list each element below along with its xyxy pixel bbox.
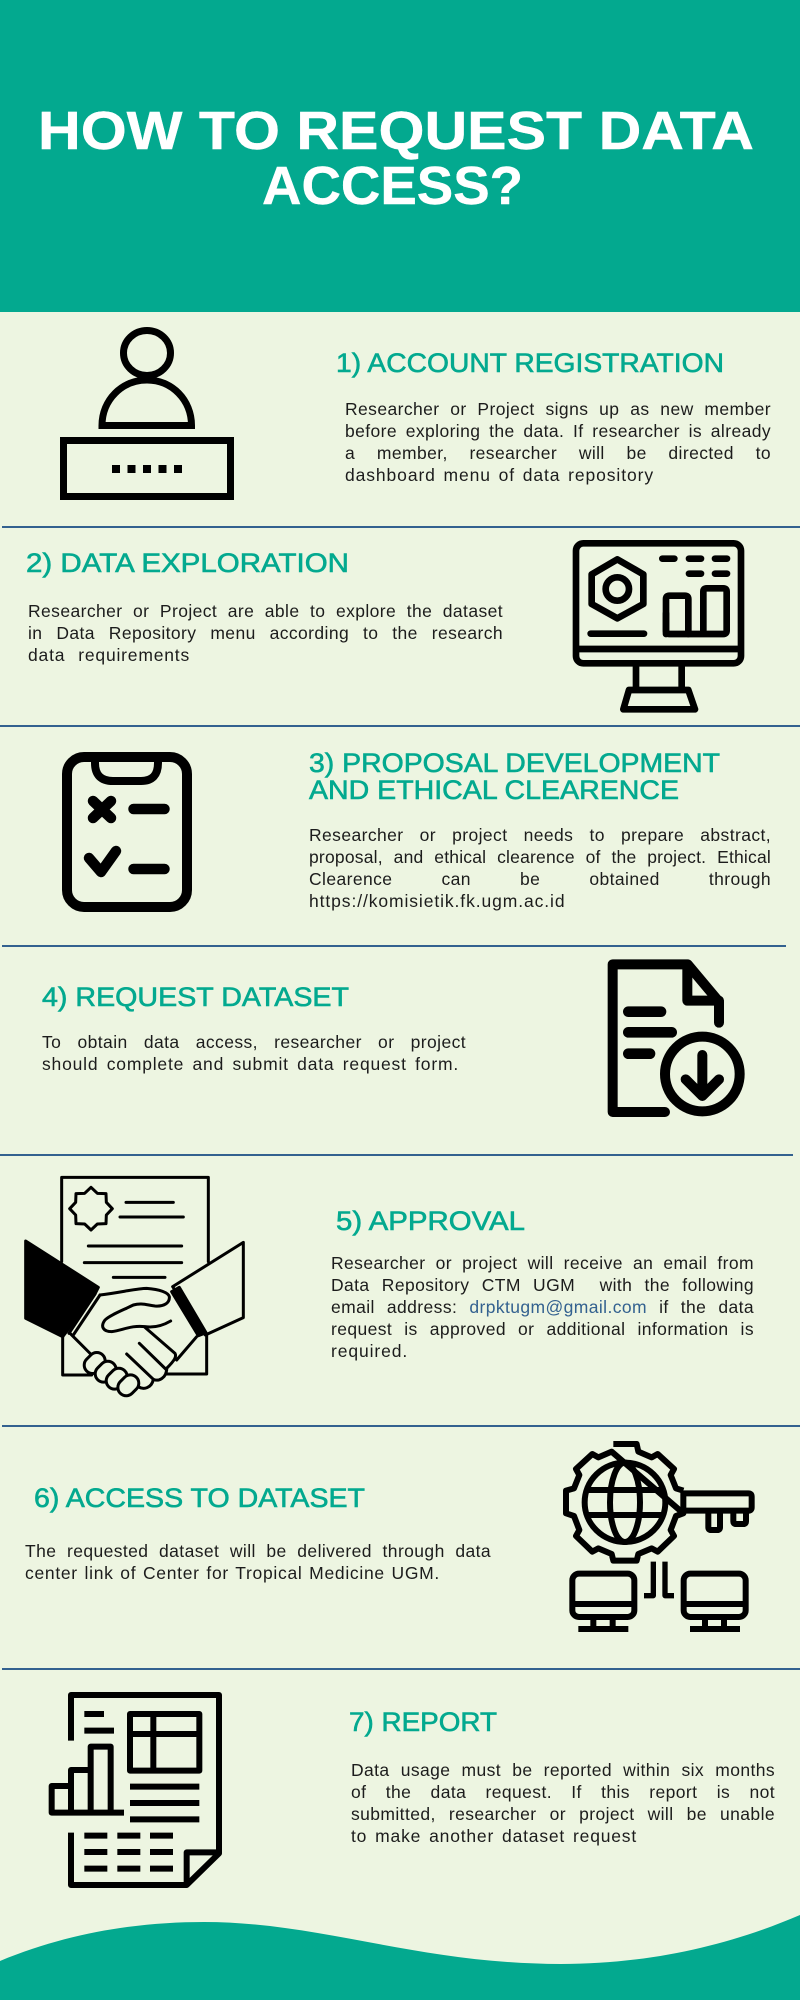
text: approval description: Researcher or project will receive an email from [331, 1253, 754, 1273]
text: approval description: Data Repository CTM UGM with the following [331, 1275, 754, 1295]
text: report description: Data usage must be reported within six months [351, 1760, 775, 1780]
icon: checklist clipboard [62, 752, 192, 912]
panel: step 7 report [48, 1692, 775, 1888]
icon: globe gear key with computers [563, 1441, 755, 1632]
heading: data exploration: 2) DATA EXPLORATION [26, 548, 348, 578]
heading: proposal development and ethical clearence: 3) PROPOSAL DEVELOPMENT [309, 748, 720, 778]
text: approval description: request is approved or additional information is [331, 1319, 754, 1339]
heading: account registration: 1) ACCOUNT REGISTRATION [336, 348, 724, 378]
heading: access to dataset: 6) ACCESS TO DATASET [34, 1483, 365, 1513]
icon: user at login box [60, 327, 234, 500]
heading: report: 7) REPORT [349, 1707, 497, 1737]
text: account registration description: before exploring the data. If researcher is already [345, 421, 771, 441]
panel: step 2 data exploration [26, 540, 744, 713]
text: report description: of the data request. If this report is not [351, 1782, 775, 1802]
panel: step 6 access to dataset [25, 1441, 755, 1632]
text: data exploration description [28, 601, 503, 665]
text: proposal description: https://komisietik.fk.ugm.ac.id [309, 891, 565, 911]
text: access to dataset description [25, 1541, 491, 1583]
text: data exploration description: in Data Repository menu according to the research [28, 623, 503, 643]
panel: step 1 account registration [60, 327, 771, 500]
heading: proposal development and ethical clearence: AND ETHICAL CLEARENCE [309, 775, 679, 805]
text: report description [351, 1760, 775, 1846]
text: proposal description: Researcher or project needs to prepare abstract, [309, 825, 771, 845]
text: access to dataset description: The requested dataset will be delivered through data [25, 1541, 491, 1561]
text: account registration description [345, 399, 771, 485]
text: report description: submitted, researcher or project will be unable [351, 1804, 775, 1824]
text: request dataset description [42, 1032, 466, 1074]
text: request dataset description: To obtain data access, researcher or project [42, 1032, 466, 1052]
icon: handshake over document [24, 1176, 245, 1398]
icon: dashboard monitor [572, 540, 744, 713]
text: account registration description: a member, researcher will be directed to [345, 443, 771, 463]
text: report description: to make another dataset request [351, 1826, 637, 1846]
icon: document download [608, 959, 745, 1117]
text: account registration description: Researcher or Project signs up as new member [345, 399, 771, 419]
text: request dataset description: should complete and submit data request form. [42, 1054, 459, 1074]
header banner [0, 0, 800, 312]
title [38, 101, 754, 216]
text: access to dataset description: center link of Center for Tropical Medicine UGM. [25, 1563, 440, 1583]
title: ACCESS? [262, 156, 523, 216]
heading: proposal development and ethical clearence [308, 748, 720, 805]
text: proposal description: proposal, and ethical clearence of the project. Ethical [309, 847, 771, 867]
title: HOW TO REQUEST DATA [38, 101, 754, 161]
panel: step 3 proposal development [62, 748, 771, 912]
text: proposal description: Clearence can be obtained through [309, 869, 771, 889]
text: proposal description [309, 825, 771, 911]
text: approval description: required. [331, 1341, 408, 1361]
text: approval description: email address: drpktugm@gmail.com if the data [331, 1297, 754, 1317]
text: account registration description: dashboard menu of data repository [345, 465, 654, 485]
footer wave [0, 1915, 800, 2000]
panel: step 4 request dataset [42, 959, 745, 1117]
heading: approval: 5) APPROVAL [336, 1206, 525, 1236]
text: data exploration description: Researcher or Project are able to explore the dataset [28, 601, 503, 621]
icon: report document with chart [48, 1692, 222, 1888]
text: data exploration description: data requirements [28, 645, 190, 665]
panel: step 5 approval [24, 1176, 754, 1398]
heading: request dataset: 4) REQUEST DATASET [42, 982, 349, 1012]
text: approval description [331, 1253, 754, 1361]
